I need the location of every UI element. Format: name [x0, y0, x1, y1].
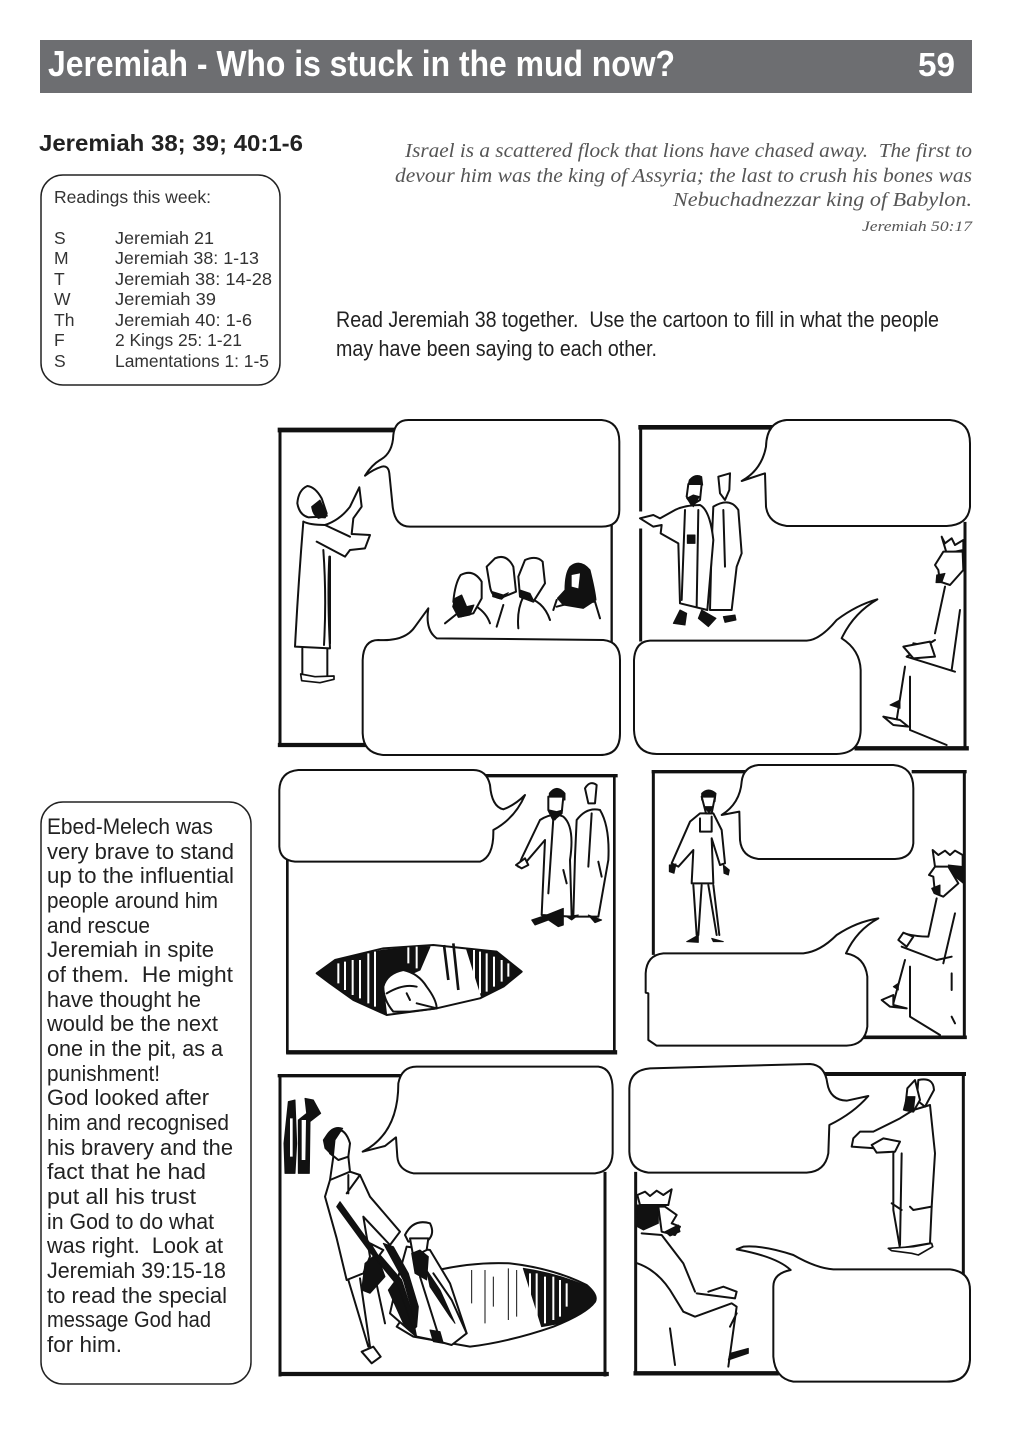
panel: Ebed-Melech note: up to the influential: [47, 863, 234, 888]
panel: Ebed-Melech note: Ebed-Melech was: [47, 814, 213, 839]
icon: pit with Jeremiah: [317, 943, 522, 1015]
title: Jeremiah - Who is stuck in the mud now?: [48, 43, 675, 84]
figure: Ebed-Melech pulling: [323, 1127, 418, 1363]
panel: Ebed-Melech note: Jeremiah in spite: [47, 937, 214, 962]
readings list: Jeremiah 21: [115, 228, 214, 248]
speech bubble: bottom: [646, 918, 878, 1046]
readings list: [54, 228, 272, 371]
readings list: S: [54, 351, 66, 371]
speech bubble: [363, 1067, 613, 1173]
speech bubble: bottom: [737, 1246, 970, 1382]
readings list: Th: [54, 310, 74, 330]
cartoon panel 1: Jeremiah preaching to the officials: [280, 420, 620, 755]
figure: two officials: [640, 473, 742, 627]
scripture quote: Nebuchadnezzar king of Babylon.: [672, 189, 972, 211]
speech bubble: [279, 770, 525, 862]
panel: Ebed-Melech note: [41, 802, 251, 1384]
panel: Ebed-Melech note: have thought he: [47, 987, 201, 1012]
panel: Ebed-Melech note: his bravery and the: [47, 1135, 233, 1160]
cartoon panel 6: Jeremiah before the king: [629, 1064, 970, 1382]
readings list: Lamentations 1: 1-5: [115, 351, 269, 371]
figure: two distant men: [284, 1098, 321, 1173]
panel: Ebed-Melech note: very brave to stand: [47, 839, 234, 864]
readings list: Jeremiah 39: [115, 289, 216, 309]
instructions: [336, 307, 939, 361]
speech bubble: top: [722, 765, 913, 859]
page number: 59: [918, 46, 955, 83]
panel: Ebed-Melech note: people around him: [47, 888, 218, 913]
figure: Ebed-Melech: [669, 790, 729, 942]
cartoon panel 2: officials before the king: [634, 420, 970, 754]
cartoon panel 4: Ebed-Melech before the king: [646, 765, 965, 1046]
figure: four officials: [445, 557, 600, 628]
cartoon panel 5: Ebed-Melech pulls Jeremiah out: [279, 1067, 613, 1375]
panel: Ebed-Melech note: fact that he had: [47, 1159, 206, 1184]
instructions: may have been saying to each other.: [336, 336, 657, 361]
figure: king on throne: [637, 1189, 748, 1367]
title bar: [40, 40, 972, 93]
readings list: F: [54, 330, 65, 350]
readings list: 2 Kings 25: 1-21: [115, 330, 242, 350]
scripture quote: Israel is a scattered flock that lions have chased away. The first to: [404, 140, 972, 162]
readings heading: Readings this week:: [54, 187, 211, 207]
section heading: Jeremiah 38; 39; 40:1-6: [39, 130, 303, 156]
figure: Jeremiah with ropes: [388, 1222, 467, 1345]
figure: Jeremiah: [295, 486, 370, 683]
readings list: T: [54, 269, 65, 289]
panel: Ebed-Melech note: put all his trust: [47, 1184, 196, 1209]
panel: Ebed-Melech note: in God to do what: [47, 1209, 214, 1234]
instructions: Read Jeremiah 38 together. Use the cartoon to fill in what the people: [336, 307, 939, 332]
panel: Ebed-Melech note: was right. Look at: [46, 1233, 223, 1258]
cartoon panel 3: Jeremiah in the cistern: [279, 770, 616, 1052]
scripture quote: Jeremiah 50:17: [862, 219, 974, 235]
figure: king on throne: [882, 850, 963, 1035]
figure: two men standing: [516, 783, 609, 927]
panel: Ebed-Melech note: God looked after: [47, 1085, 209, 1110]
panel: Ebed-Melech note: message God had: [47, 1307, 211, 1332]
readings list: Jeremiah 40: 1-6: [115, 310, 252, 330]
panel: Ebed-Melech note: and rescue: [47, 913, 150, 938]
panel: Ebed-Melech note: him and recognised: [47, 1110, 229, 1135]
speech bubble: top: [742, 420, 970, 526]
readings list: Jeremiah 38: 14-28: [115, 269, 272, 289]
panel: readings this week: [41, 175, 280, 385]
scripture quote: devour him was the king of Assyria; the last to crush his bones was: [395, 165, 972, 187]
panel: Ebed-Melech note: for him.: [47, 1332, 122, 1357]
panel: Ebed-Melech note: would be the next: [46, 1011, 218, 1036]
panel: Ebed-Melech note: one in the pit, as a: [47, 1036, 224, 1061]
speech bubble: bottom: [634, 599, 877, 754]
panel: Ebed-Melech note: to read the special: [47, 1283, 227, 1308]
readings list: M: [54, 248, 69, 268]
speech bubble: bottom: [363, 608, 620, 755]
speech bubble: top: [365, 420, 619, 527]
readings list: W: [54, 289, 71, 309]
panel: Ebed-Melech note: Jeremiah 39:15-18: [47, 1258, 226, 1283]
scripture quote: [395, 140, 974, 235]
figure: Jeremiah: [852, 1079, 935, 1255]
figure: king on throne: [883, 537, 963, 745]
readings list: S: [54, 228, 66, 248]
panel: Ebed-Melech note: of them. He might: [47, 962, 233, 987]
readings list: Jeremiah 38: 1-13: [115, 248, 259, 268]
speech bubble: top: [629, 1064, 868, 1173]
panel: Ebed-Melech note: punishment!: [47, 1061, 160, 1086]
icon: pit: [397, 1263, 596, 1347]
